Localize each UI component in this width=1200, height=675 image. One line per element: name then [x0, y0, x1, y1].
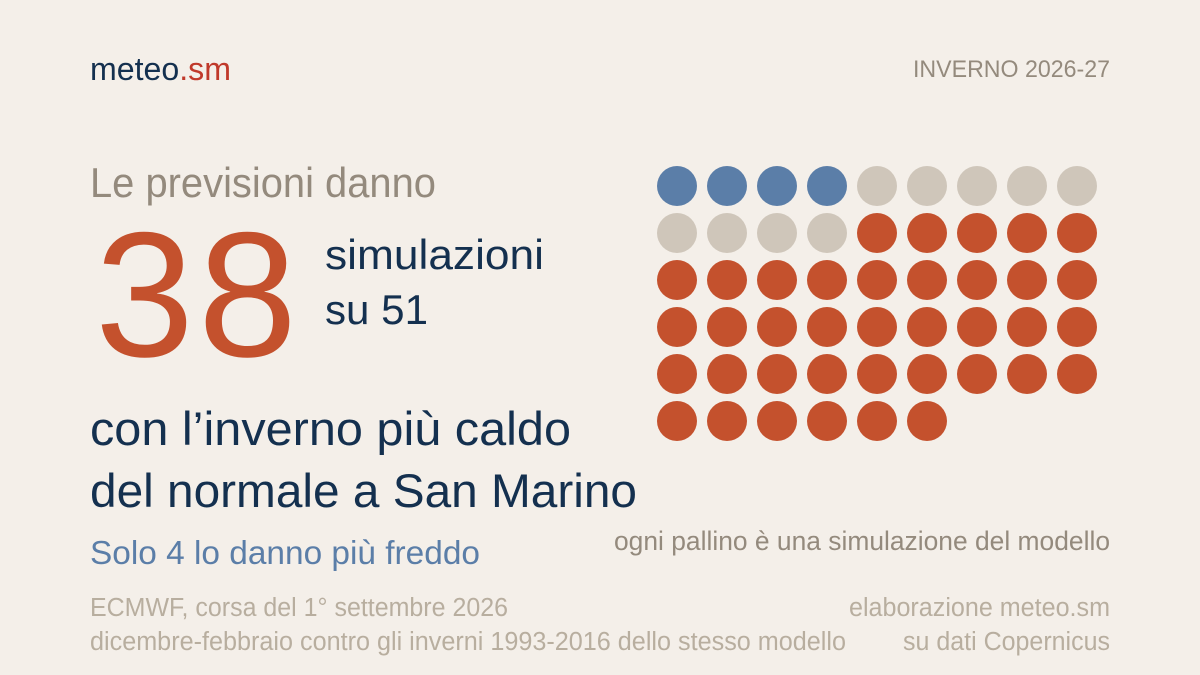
source note left — [90, 594, 846, 656]
dot chart: 51 simulations — [657, 166, 1097, 441]
row 4 — [657, 307, 1097, 347]
source note left: ECMWF, corsa del 1° settembre 2026 — [90, 594, 508, 622]
big number 38: 38 — [95, 195, 297, 394]
credit note right: elaborazione meteo.sm — [849, 594, 1110, 622]
row 2 — [657, 213, 1097, 253]
subheading: colder: Solo 4 lo danno più freddo — [90, 534, 480, 571]
simulation count text — [325, 231, 544, 333]
season label: INVERNO 2026-27 — [913, 56, 1110, 83]
row 1 — [657, 166, 1097, 206]
simulation count text: su 51 — [325, 286, 428, 333]
credit note right — [849, 594, 1110, 656]
main statement: del normale a San Marino — [90, 465, 637, 518]
logo: meteo.sm: meteo.sm — [90, 51, 231, 87]
row 3 — [657, 260, 1097, 300]
heading intro: Le previsioni danno — [90, 159, 436, 206]
main statement: con l’inverno più caldo — [90, 403, 571, 456]
credit note right: su dati Copernicus — [903, 628, 1110, 656]
main statement — [90, 403, 637, 518]
source note left: dicembre-febbraio contro gli inverni 1993-2016 dello stesso modello — [90, 628, 846, 656]
simulation count text: simulazioni — [325, 231, 544, 278]
row 6 — [657, 401, 947, 441]
chart legend note: ogni pallino è una simulazione del modello — [614, 526, 1110, 556]
row 5 — [657, 354, 1097, 394]
